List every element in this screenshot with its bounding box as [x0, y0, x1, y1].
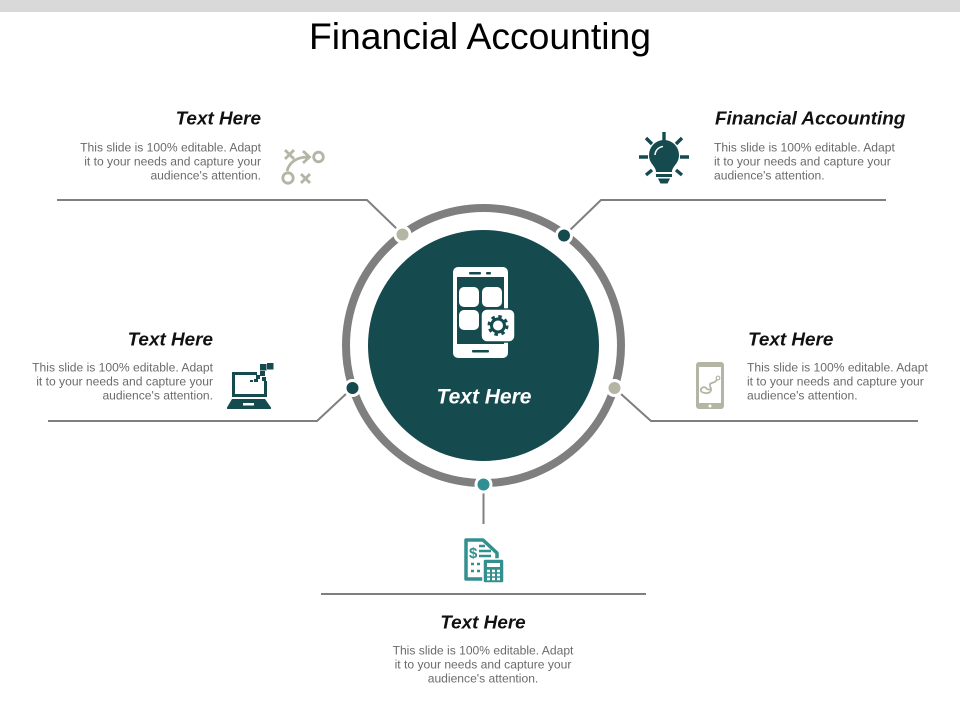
heading: Text Here [128, 330, 213, 350]
text block: This slide is 100% editable. Adapt [80, 140, 262, 154]
panel: bottom [321, 477, 646, 686]
text block: it to your needs and capture your [36, 374, 213, 388]
central ring diagram [346, 208, 621, 483]
icon: light bulb [639, 132, 689, 184]
connector line [621, 394, 918, 421]
heading: Text Here [748, 330, 833, 350]
icon: phone with route [696, 362, 724, 409]
marker dot [395, 227, 410, 242]
heading: Text Here [176, 108, 261, 130]
marker dot [476, 477, 491, 492]
text block: audience's attention. [428, 672, 538, 686]
heading: Text Here [440, 612, 526, 634]
panel: middle left [32, 330, 360, 421]
text block: it to your needs and capture your [395, 658, 571, 672]
text block: audience's attention. [150, 168, 261, 182]
heading: Financial Accounting [715, 108, 906, 130]
text block: it to your needs and capture your [747, 374, 924, 388]
title: Financial Accounting [309, 15, 651, 57]
outer ring [346, 208, 621, 483]
icon: invoice and calculator [466, 540, 504, 583]
text block: audience's attention. [102, 388, 213, 402]
icon: laptop with pixels [227, 363, 274, 409]
text block: This slide is 100% editable. Adapt [747, 360, 928, 374]
panel: top right [556, 108, 906, 243]
text block: This slide is 100% editable. Adapt [32, 360, 214, 374]
icon: smartphone with apps and gear [453, 267, 515, 358]
marker dot [607, 380, 622, 396]
text block: This slide is 100% editable. Adapt [393, 644, 574, 658]
panel: top left [57, 108, 410, 242]
connector line [48, 393, 347, 421]
text block: This slide is 100% editable. Adapt [714, 140, 895, 154]
text block: audience's attention. [714, 168, 825, 182]
text block: it to your needs and capture your [714, 154, 891, 168]
marker dot [345, 380, 360, 396]
divider line [321, 593, 646, 595]
marker dot [556, 228, 572, 243]
icon: play strategy [283, 150, 323, 183]
connector line [570, 200, 886, 230]
icon: invoice and calculator: $ [469, 545, 478, 562]
text block: audience's attention. [747, 388, 858, 402]
center disc [368, 230, 599, 461]
center label: Text Here [437, 386, 532, 408]
panel: middle right [607, 330, 928, 421]
connector line [482, 492, 484, 524]
connector line [57, 200, 397, 229]
text block: it to your needs and capture your [84, 154, 261, 168]
